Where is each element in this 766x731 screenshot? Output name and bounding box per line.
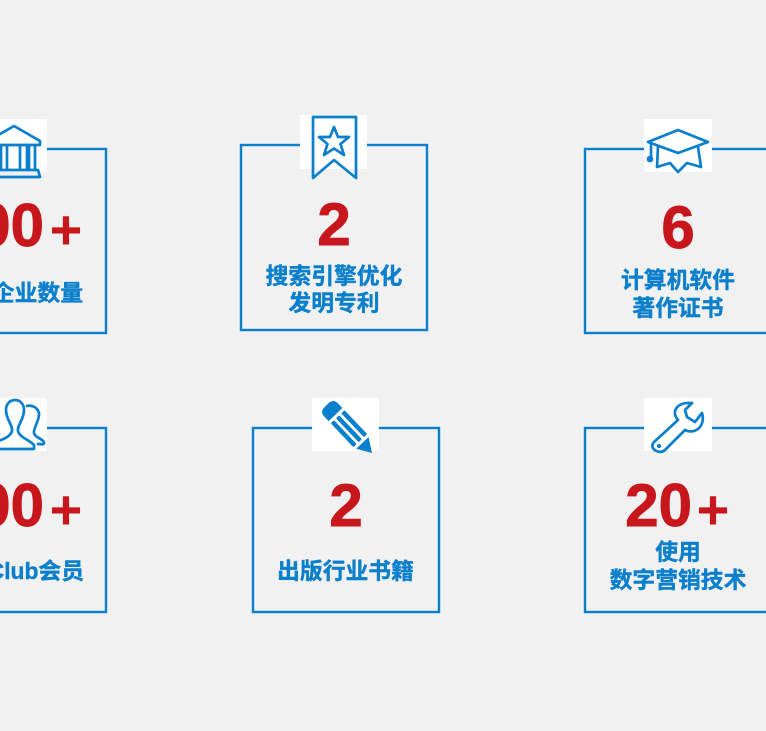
icon: bank building <box>0 126 40 177</box>
number: books: 2 <box>329 472 363 539</box>
label: copyrights: 计算机软件 <box>621 267 735 293</box>
panel: digital marketing technologies: 数字营销技术 <box>610 567 747 593</box>
number: patents: 2 <box>317 191 351 258</box>
panel: search engine patents: 发明专利 <box>288 290 380 316</box>
number: copyrights: 6 <box>661 194 695 261</box>
plus sign: + <box>697 478 729 541</box>
icon: bookmark with star <box>313 117 356 178</box>
panel: published books <box>253 398 439 612</box>
panel: software copyrights <box>585 119 766 333</box>
label: technologies: 使用 <box>655 539 701 565</box>
panel: enterprises <box>0 119 106 333</box>
icon: graduation cap <box>648 130 708 172</box>
icon: people <box>0 400 44 449</box>
plus sign: + <box>50 198 82 261</box>
icon: wrench <box>652 403 703 452</box>
panel: digital marketing technologies <box>585 398 766 612</box>
panel: search engine patents <box>241 115 427 330</box>
label: patents: 搜索引擎优化 <box>266 263 403 289</box>
panel: software copyrights: 著作证书 <box>632 295 724 321</box>
number: technologies: 20 <box>625 472 692 539</box>
panel: club members <box>0 398 106 612</box>
label: books: 出版行业书籍 <box>277 558 414 584</box>
icon: pencil <box>320 399 379 460</box>
plus sign: + <box>50 478 82 541</box>
